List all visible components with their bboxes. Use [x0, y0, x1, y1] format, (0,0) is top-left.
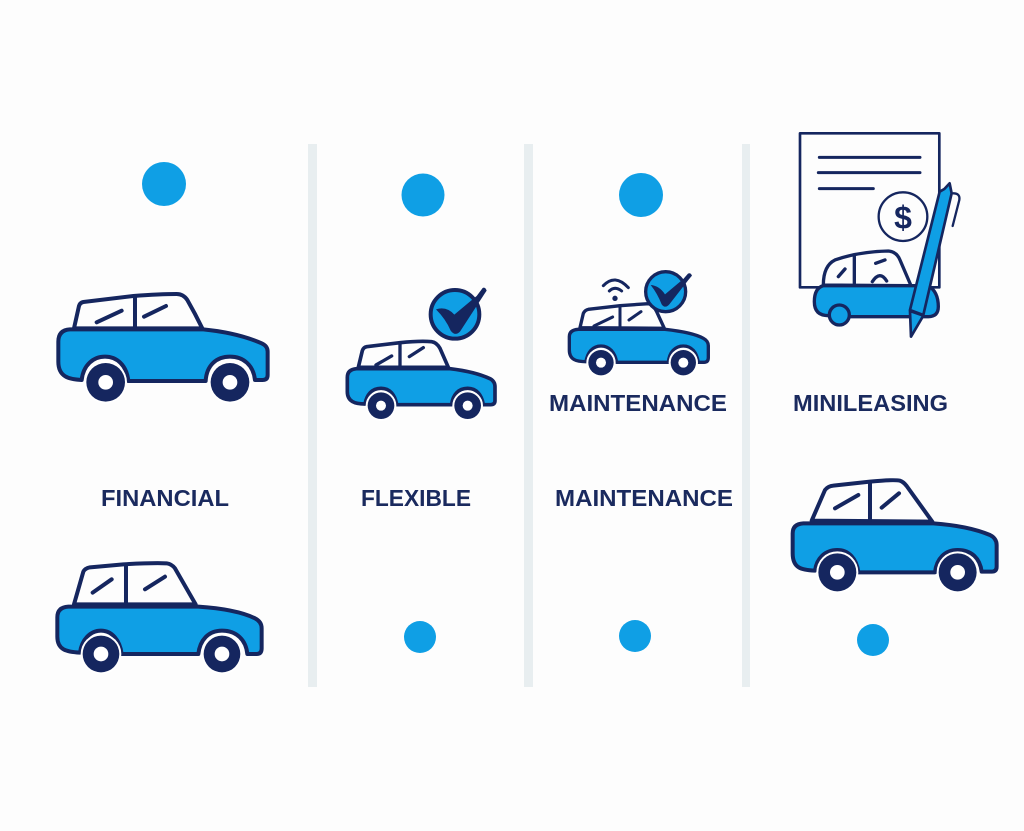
icon: car minileasing	[793, 480, 997, 593]
dot: flexible top	[402, 174, 444, 216]
label: maintenance lower: MAINTENANCE	[555, 485, 733, 511]
icon: car financial upper	[58, 294, 268, 404]
label: maintenance upper: MAINTENANCE	[549, 390, 727, 416]
label: minileasing: MINILEASING	[793, 390, 948, 416]
panel: financial	[57, 162, 268, 674]
dot: minileasing bottom	[857, 624, 889, 656]
icon: connected car with check badge	[569, 272, 708, 377]
dot: maintenance top	[619, 173, 663, 217]
label: financial: FINANCIAL	[101, 485, 229, 511]
icon: car financial lower	[57, 563, 262, 674]
panel: flexible	[347, 174, 495, 653]
dot: flexible bottom	[404, 621, 436, 653]
panel: maintenance	[549, 173, 733, 652]
icon: car with check badge	[347, 288, 495, 421]
dot: maintenance bottom	[619, 620, 651, 652]
dot: financial top	[142, 162, 186, 206]
icon: contract with car and pen: $	[894, 199, 912, 235]
panel: minileasing	[793, 133, 997, 656]
icon: contract with car and pen	[800, 133, 959, 337]
label: flexible: FLEXIBLE	[361, 485, 471, 511]
